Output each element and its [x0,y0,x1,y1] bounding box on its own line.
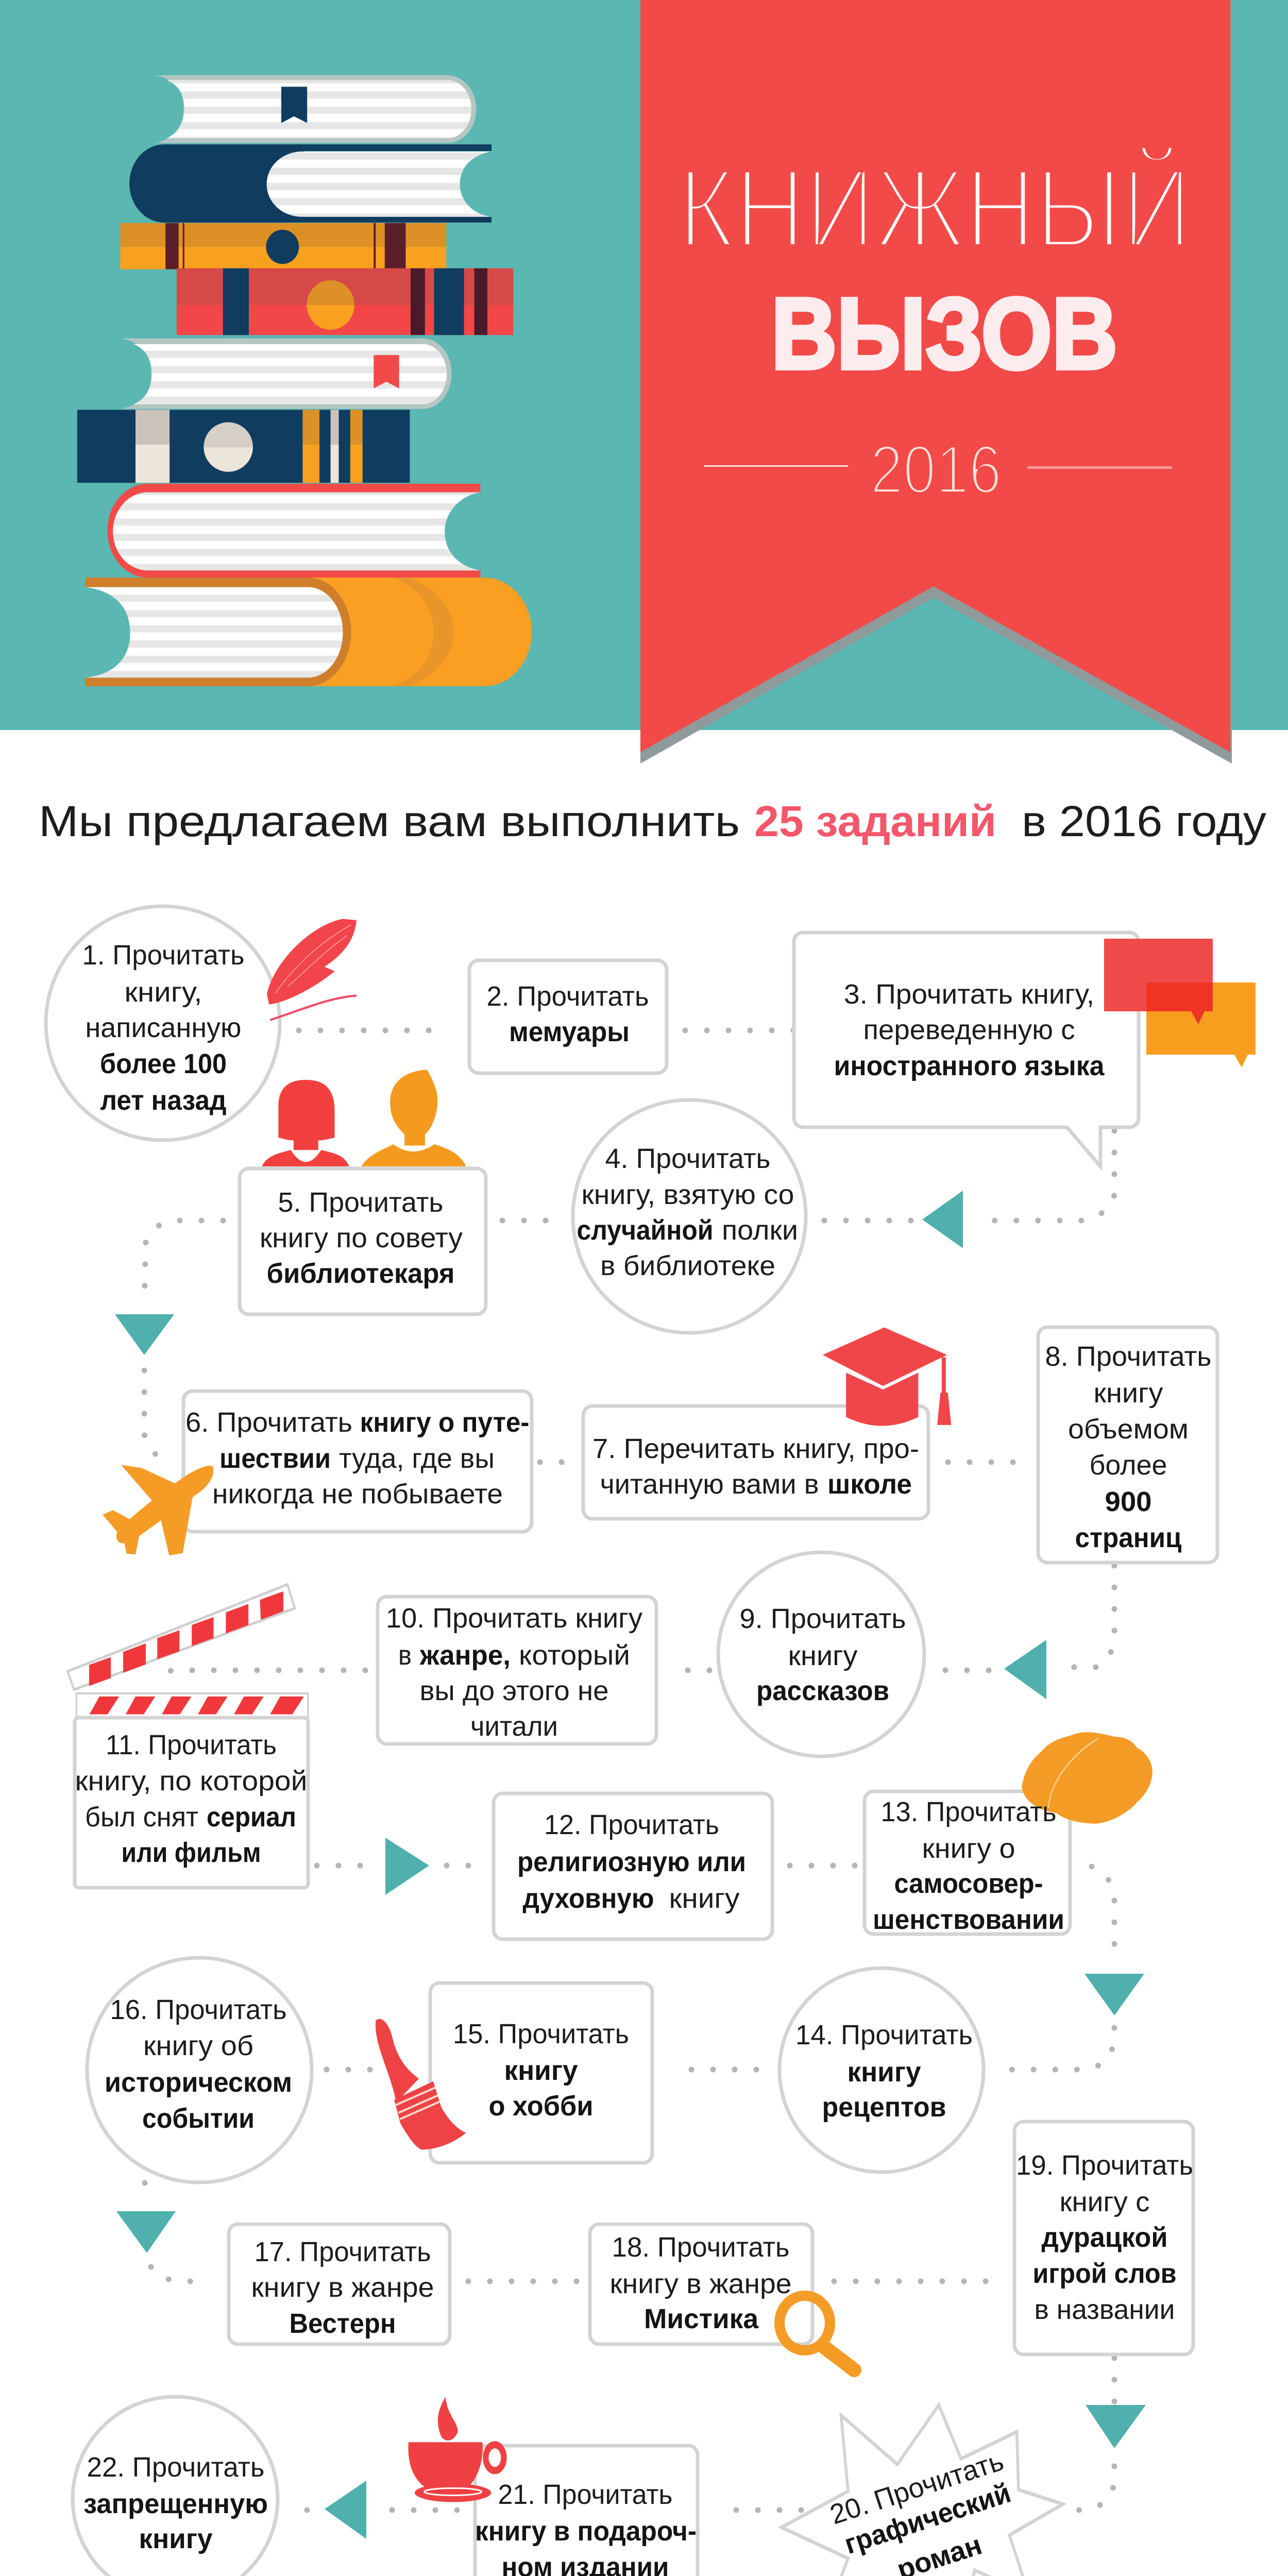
task 4 [573,1100,806,1333]
task 5: 5. Прочитать [278,1187,443,1218]
task 1: книгу, [125,977,202,1008]
task 19: книгу с [1059,2187,1150,2217]
arrow: task 3 to 4 [922,1191,963,1248]
task 17: книгу в жанре [251,2272,434,2303]
subtitle: Мы предлагаем вам выполнить [39,797,740,845]
task 11: clapperboard [68,1585,308,1888]
task 2: мемуары [509,1016,630,1047]
task 4: полки [722,1215,798,1246]
task 8: объемом [1068,1414,1189,1445]
task 16 [87,1958,312,2182]
task 8: 8. Прочитать [1045,1341,1212,1372]
starburst outline [782,2405,1063,2576]
task 15: книгу [504,2055,578,2086]
task text [75,1730,307,1868]
task 17 [229,2224,450,2344]
task 14 [779,1968,984,2172]
task 19: игрой слов [1032,2258,1177,2289]
dotted path connecting tasks [144,1030,1114,2576]
clapper arm [68,1585,295,1690]
task 16: книгу об [143,2030,253,2061]
task 22: книгу [139,2523,212,2554]
task 17: Вестерн [290,2308,396,2339]
task 1 [46,906,280,1140]
task 1: написанную [86,1012,241,1043]
task 6: шествии [219,1443,331,1474]
year rule right [1027,466,1172,469]
task text [873,1797,1064,1935]
task 5 [240,1168,486,1314]
task 9: книгу [788,1640,857,1671]
task 12: 12. Прочитать [544,1809,719,1840]
task 15: о хобби [488,2091,594,2122]
task 10 [378,1597,656,1744]
task text: 20. Прочитать [826,2445,1007,2530]
task 18: книгу в жанре [610,2268,791,2299]
task 12 [494,1793,772,1939]
task 18: Мистика [644,2303,759,2334]
icon: magnifying glass [779,2296,854,2370]
task text: сериал [207,1802,296,1833]
task 10: который [519,1640,630,1671]
task 16: историческом [105,2067,292,2098]
header background [0,0,1288,730]
arrow: task 19 to 20 [1086,2405,1146,2448]
task 18 [590,2224,812,2344]
task 1: более 100 [100,1048,227,1079]
book 4: red spine [177,268,513,335]
task box [75,1718,308,1888]
task 8: страниц [1075,1522,1182,1553]
task text: самосовер- [894,1868,1043,1899]
ribbon body [640,0,1230,752]
year rule left [704,465,848,467]
icon: paint brush [376,2019,466,2149]
ribbon banner [640,0,1232,764]
task 14: 14. Прочитать [795,2020,973,2050]
task 10: в [398,1640,412,1671]
task 3: 3. Прочитать книгу, [844,979,1094,1010]
task text: графический [841,2478,1014,2560]
book 7: red cover with pages [107,484,480,578]
task 4: книгу, взятую со [581,1179,794,1210]
task 8 [1038,1327,1217,1563]
task 3: переведенную с [863,1014,1075,1045]
arrow: task 8 to 9 [1004,1640,1046,1699]
task 5: библиотекаря [267,1258,454,1289]
task 12: книгу [669,1883,740,1914]
task 20: starburst [782,2405,1063,2576]
task 10: читали [470,1711,558,1742]
arrow: task 16 to 17 [116,2211,176,2253]
task text [826,2445,1014,2576]
task text: был снят [85,1802,198,1833]
task 8: 900 [1105,1486,1152,1517]
book 6: navy spine [77,410,410,483]
task 19: дурацкой [1042,2222,1167,2253]
book 5: white with red bookmark [121,338,452,409]
task 19: в названии [1035,2294,1175,2325]
icon: teacup [409,2397,504,2502]
task 13 [865,1732,1153,1935]
task 21: книгу в подароч- [475,2516,697,2547]
arrow: task 11 to 12 [385,1838,429,1895]
task 2 [469,960,667,1073]
subtitle highlight: 25 заданий [754,797,996,845]
title line 1: КНИЖНЫЙ [678,144,1192,272]
subtitle end: в 2016 году [1022,797,1266,845]
task 6: 6. Прочитать [185,1407,352,1438]
clapper body strip [76,1693,308,1718]
arrow: task 5 to 6 [115,1314,174,1355]
task 1: лет назад [100,1085,227,1116]
task 10: 10. Прочитать книгу [386,1603,642,1634]
task text: шенствовании [873,1904,1064,1935]
task 22: 22. Прочитать [87,2452,265,2483]
icon: red feather [267,919,357,1020]
task 8: более [1089,1450,1167,1481]
task 15 [430,1983,652,2163]
book 3: orange spine [121,223,446,269]
arrow: task 21 to 22 [325,2481,366,2539]
icon: brain [1022,1732,1153,1824]
task 7: читанную вами в [600,1469,819,1500]
task 19 [1014,2122,1193,2354]
task 10: вы до этого не [419,1675,609,1706]
icon: speech bubbles [1104,939,1256,1067]
task 15: 15. Прочитать [453,2019,629,2049]
task text: книгу о [922,1833,1015,1864]
task 7: школе [827,1469,912,1500]
task 22: запрещенную [83,2488,268,2519]
task 7 [583,1406,928,1519]
task 4: случайной [577,1215,713,1246]
book 8: orange cover with pages [86,578,532,686]
task 7: 7. Перечитать книгу, про- [592,1433,919,1464]
icon: graduation cap [823,1327,951,1426]
task 12: духовную [522,1883,654,1914]
task 21: 21. Прочитать [498,2479,673,2510]
task text: 11. Прочитать [106,1730,277,1760]
task 3: иностранного языка [834,1050,1105,1081]
task text: книгу, по которой [75,1766,307,1797]
task 16: 16. Прочитать [110,1994,286,2025]
ribbon shadow [640,0,1232,764]
task 9: 9. Прочитать [740,1603,906,1634]
task 1: 1. Прочитать [82,940,244,971]
task 6: книгу о путе- [360,1407,530,1438]
task 9: рассказов [756,1675,889,1706]
icon: librarians [262,1070,466,1166]
task text: или фильм [122,1837,261,1868]
task 3 [794,933,1139,1166]
task 14: книгу [847,2057,921,2088]
subtitle [39,797,1266,845]
task 4: 4. Прочитать [605,1143,771,1174]
task 10: жанре, [419,1640,511,1671]
task 4: в библиотеке [600,1250,775,1281]
book 2: navy cover with pages [129,144,492,223]
task 21 [475,2446,698,2576]
task 19: 19. Прочитать [1016,2150,1193,2181]
task 6: туда, где вы [339,1443,495,1474]
task 18: 18. Прочитать [612,2232,789,2263]
task 14: рецептов [822,2092,946,2123]
task 8: книгу [1093,1378,1163,1409]
task 5: книгу по совету [260,1223,463,1253]
task 6 [183,1391,532,1532]
task 17: 17. Прочитать [255,2236,431,2267]
task 6: никогда не побываете [212,1479,503,1510]
task 16: событии [142,2103,255,2134]
task text: 13. Прочитать [881,1797,1056,1827]
task 22 [73,2397,278,2576]
task 9 [718,1552,924,1756]
arrow: task 13 to 14 [1084,1974,1144,2015]
year: 2016 [870,432,1002,508]
illustration: stack of books [77,75,532,686]
task 12: религиозную или [517,1846,746,1877]
book 1: white with navy bookmark [155,75,476,143]
title line 2: ВЫЗОВ [771,277,1117,390]
icon: airplane [103,1465,213,1555]
task 2: 2. Прочитать [486,981,649,1012]
